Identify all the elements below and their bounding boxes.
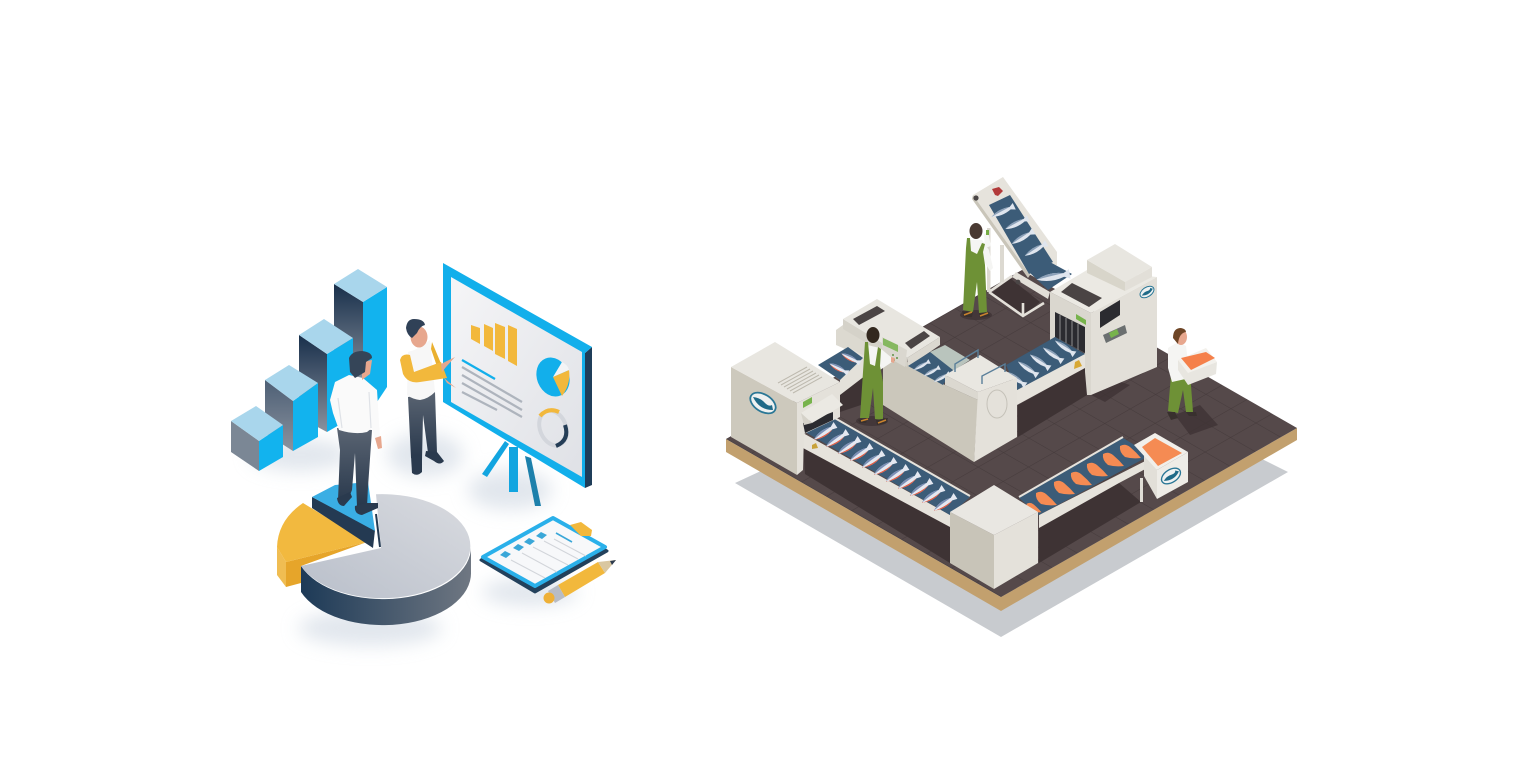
carried box of salmon (1178, 348, 1217, 385)
salmon fillets (1027, 445, 1141, 512)
raw fish row (812, 422, 957, 513)
blue step (312, 497, 375, 548)
vent lines (778, 367, 822, 393)
incline belt fish (990, 203, 1071, 284)
board easel legs (482, 441, 541, 506)
machine: front left unit (731, 342, 843, 475)
inner belt (908, 352, 953, 385)
yellow pie slice (277, 547, 286, 587)
platform ground shadow (735, 459, 1288, 637)
fillet collection box (1134, 433, 1188, 499)
illustration: business analytics team (231, 263, 616, 646)
glass guard (930, 345, 970, 371)
inclined fish conveyor (972, 177, 1072, 317)
console upper (836, 325, 882, 366)
conveyor: rear right fish belt (1004, 337, 1085, 405)
gray pie base (301, 546, 471, 625)
machine: central filleting unit (836, 299, 1017, 462)
checklist lines (511, 533, 586, 578)
tiled floor (726, 270, 1297, 597)
soft ground shadows (250, 433, 578, 646)
platform base (726, 428, 1297, 611)
console panel (882, 337, 907, 367)
board donut chart (534, 406, 572, 450)
board mini bar chart (471, 323, 517, 366)
belt fish (1004, 338, 1076, 388)
machine shadows on floor (803, 310, 1218, 563)
top housing box (1087, 244, 1152, 291)
hood over outlet (801, 394, 843, 423)
figure: man standing on pie chart (330, 351, 382, 515)
figure: worker carrying box (1167, 328, 1217, 420)
red arrow mark (992, 187, 1003, 196)
machine: right unit (1050, 244, 1158, 395)
conveyor: salmon fillet belt (1019, 437, 1153, 528)
presentation board (443, 263, 592, 506)
board text lines (462, 360, 522, 417)
logo (747, 388, 779, 418)
figure: presenter in white shirt (400, 319, 456, 475)
illustration: isometric fish processing factory (726, 177, 1297, 637)
bar chart: 3D columns (231, 269, 387, 471)
clipboard clip (570, 522, 592, 536)
pencil (544, 560, 616, 604)
conveyor: left rear belt (818, 347, 870, 395)
top cover (945, 375, 978, 400)
figure: worker at console (858, 327, 895, 425)
conveyor: raw fish belt (803, 417, 970, 527)
pie chart platform (277, 482, 471, 625)
figure: worker at incline (962, 223, 993, 318)
checkboxes (500, 532, 547, 558)
conveyor support frame (987, 228, 1044, 317)
board pie chart (531, 352, 575, 402)
logo (1136, 280, 1158, 304)
clipboard checklist (481, 518, 607, 592)
control screen (1100, 300, 1120, 328)
dark outlet comb (803, 412, 833, 433)
junction block (950, 485, 1038, 589)
